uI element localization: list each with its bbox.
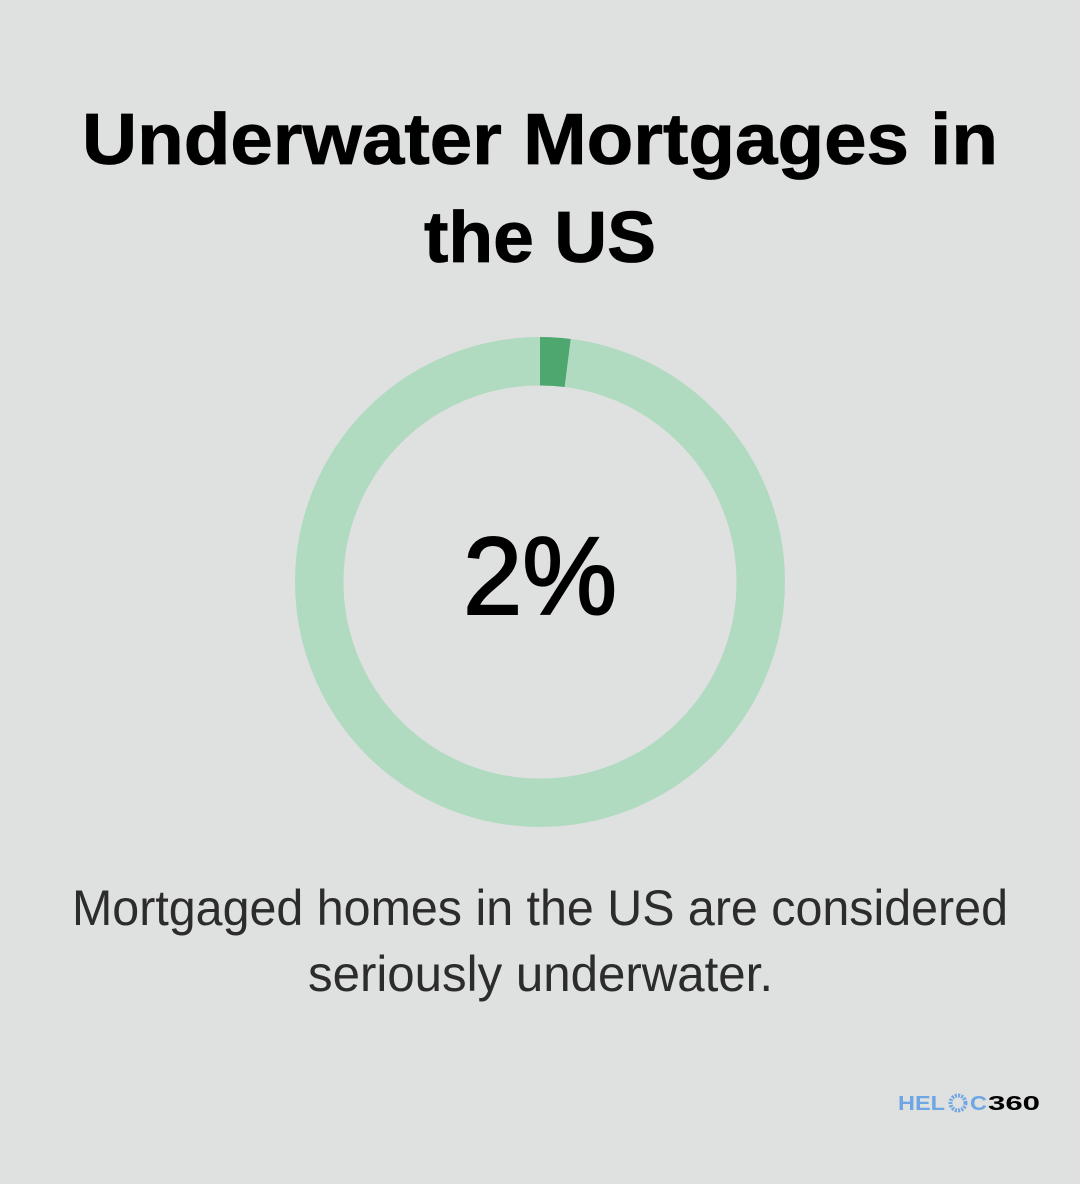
description text: seriously underwater. bbox=[308, 946, 773, 1002]
description text: Mortgaged homes in the US are considered bbox=[72, 880, 1008, 936]
donut value: 2% bbox=[463, 515, 617, 638]
logo: HELOC360: 360 bbox=[988, 1093, 1040, 1115]
title bbox=[82, 100, 998, 278]
logo: HELOC360: HEL bbox=[898, 1093, 945, 1115]
icon: logo spiral bbox=[950, 1096, 966, 1110]
description text bbox=[72, 880, 1008, 1002]
donut highlighted segment bbox=[540, 337, 571, 387]
logo: HELOC360: C bbox=[970, 1093, 987, 1115]
donut track bbox=[319, 361, 761, 803]
donut chart: 2% bbox=[319, 337, 761, 803]
title: Underwater Mortgages in bbox=[82, 100, 998, 180]
logo: HELOC360 bbox=[898, 1093, 1040, 1115]
title: the US bbox=[424, 198, 656, 278]
